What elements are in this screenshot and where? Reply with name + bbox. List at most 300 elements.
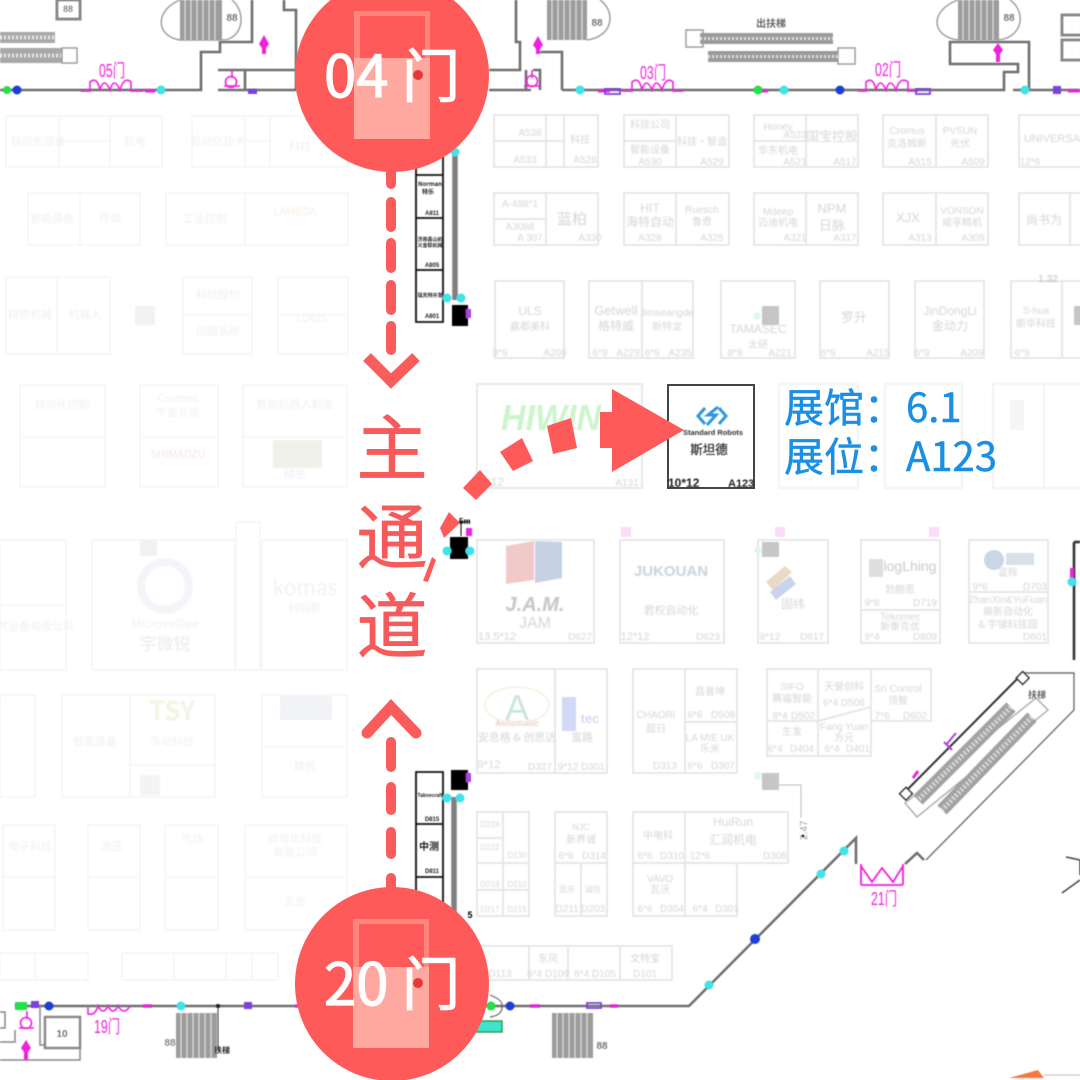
bottom-left restroom walls: 10: [56, 1029, 68, 1040]
faded booth labels: left hall: 智能机器人制造: [256, 396, 334, 412]
stair bottom centre-left: 88: [164, 1038, 176, 1049]
booth labels: right hall: D719: [913, 598, 937, 609]
booth labels: right hall: A309: [961, 233, 985, 244]
faded logos: left hall: [135, 306, 332, 795]
booth labels: right hall: D113: [488, 969, 512, 980]
main aisle label: [356, 393, 428, 673]
booth labels: right hall: 国宝控股: [806, 126, 858, 145]
faded booth labels: left hall: 科技股份: [196, 286, 240, 302]
booth labels: right hall: 9*12: [478, 759, 500, 771]
booth labels: right hall: 迈迪机电: [758, 214, 798, 229]
booth labels: right hall: D703: [1023, 582, 1047, 593]
badge circle: [295, 887, 489, 1080]
small booth column upper: 瑞克特开发: [417, 292, 443, 299]
booth labels: right hall: 安息格 & 创思达: [478, 729, 556, 745]
door icon: [353, 919, 429, 1048]
gate 19: [88, 1006, 130, 1037]
exhibition info: hall and booth: [784, 376, 997, 483]
small booth column upper: A805: [425, 263, 440, 269]
center escalators: [686, 17, 855, 64]
logo: JAM flag: [506, 541, 562, 584]
gate 02: [858, 60, 918, 91]
small booth column lower: D815: [425, 817, 440, 823]
logo: Automatic A: A: [505, 687, 529, 728]
aisle char 2: 通: [356, 482, 428, 584]
booth labels: right hall: Ruesch: [685, 205, 719, 216]
booth labels: right hall: 太研: [748, 336, 768, 351]
booth labels: right hall: 方元: [834, 729, 854, 744]
center escalators: 出扶梯: [756, 17, 786, 30]
stair capsule 3: 88: [1003, 13, 1015, 24]
booth labels: right hall: 12*6: [690, 851, 711, 862]
faded booth labels: left hall: 宇宙光电: [156, 404, 200, 420]
gray partitions: [454, 150, 455, 920]
booth labels: right hall: 尚书为: [1026, 211, 1062, 228]
booth labels: right hall: 6*6: [637, 851, 653, 862]
booth labels: right hall: logLhing: [884, 558, 936, 574]
stair bottom centre-right: [552, 1013, 608, 1058]
booth labels: right hall: 克洛姆斯: [887, 135, 927, 150]
small booth column upper: 特乐: [422, 187, 434, 196]
faded booth labels: left hall: 精密: [284, 466, 306, 482]
booth labels: right hall: 新泰克优: [880, 618, 920, 633]
booth labels: right hall: 12*12: [621, 631, 649, 643]
gate 02: 02门: [875, 60, 901, 80]
small booth column upper: 义金联机械: [417, 242, 443, 249]
booth labels: right hall: & 宇锑科技园: [978, 616, 1038, 631]
booth labels: right hall: D404: [790, 744, 814, 755]
faded booth labels: left hall: 宇微锐: [140, 630, 190, 655]
booth labels: right hall: 新界诚: [566, 831, 596, 846]
booth labels: right hall: 凯乐: [559, 884, 575, 895]
booth labels: right hall: D203: [581, 904, 605, 915]
booth labels: right hall: 9*6: [972, 582, 988, 593]
orange marker: [1009, 1070, 1080, 1078]
faded booth labels: left hall: 电子科技: [8, 838, 52, 854]
booth labels: right hall: 乐米: [700, 740, 720, 755]
logo: blue badge: [984, 550, 1034, 570]
lift box: 88: [63, 4, 73, 14]
booth labels: right hall: 6*9: [592, 348, 608, 359]
booth labels: right hall: 新特龙: [652, 318, 682, 333]
green dots: [3, 86, 762, 1010]
booth labels: right hall: 中电科: [643, 827, 673, 842]
booth labels: right hall: A521: [783, 157, 807, 168]
badge circle: [295, 0, 489, 172]
stair capsule 2: [547, 0, 610, 40]
booth labels: right hall: A515: [908, 157, 932, 168]
booth labels: right hall: 智能设备: [630, 141, 670, 156]
hall value: 6.1: [906, 376, 962, 434]
booth labels: right hall: D809: [913, 632, 937, 643]
bottom-left restroom walls: [0, 1006, 80, 1060]
target booth A123: [668, 385, 754, 490]
logo: Automatic A: [485, 687, 549, 728]
booth labels: right hall: 7*6: [874, 711, 890, 722]
booth labels: right hall: D211: [555, 904, 579, 915]
black pillars: [450, 305, 473, 920]
booth labels: right hall: D307: [711, 761, 735, 772]
booth labels: right hall: 斯华科技: [1016, 315, 1056, 330]
booth labels: right hall: D130: [507, 851, 527, 860]
booth labels: right hall: 光伏: [950, 135, 970, 150]
booth labels: right hall: 金动力: [932, 317, 968, 334]
booth labels: right hall: 12*6: [1020, 157, 1041, 168]
booth labels: right hall: Honey: [764, 122, 792, 133]
booth labels: right hall: NPM: [818, 201, 846, 216]
booth labels: right hall: 固纬: [781, 595, 805, 612]
gate 03: [622, 63, 683, 91]
booth labels: right hall: 科技公司: [630, 116, 670, 131]
booth labels: right hall: JinDongLi: [923, 304, 977, 318]
booth labels: right hall: 展新自动化: [983, 603, 1033, 618]
booth labels: right hall: D313: [653, 761, 677, 772]
booth labels: right hall: A3088: [506, 222, 535, 233]
booth labels: right hall: A530: [638, 157, 662, 168]
gate 21: [861, 864, 903, 909]
booth labels: right hall: Tekomec: [880, 612, 920, 623]
booth labels: right hall: PVSUN: [943, 126, 977, 137]
faded booth labels: left hall: 自动化科技: [268, 830, 322, 846]
small booth column lower: [416, 772, 443, 925]
booth labels: right hall: A 307: [517, 233, 543, 244]
faded booth labels: left hall: [0, 133, 338, 909]
lift box: [57, 0, 80, 19]
small booth column lower: D811: [425, 869, 440, 875]
aisle char 3: 道: [356, 571, 428, 673]
booth labels: right hall: D308: [763, 851, 787, 862]
booth labels: right hall: VONSON: [940, 206, 984, 217]
stair bottom centre-right: 88: [596, 1041, 608, 1052]
black pillars: 5: [467, 910, 473, 920]
faded booth labels: left hall: komas: [272, 572, 338, 602]
booth labels: right hall: A517: [833, 157, 857, 168]
booth labels: right hall: 科技・智造: [677, 133, 727, 148]
booth labels: right hall: 赛福智能: [772, 690, 812, 705]
stair capsule 1: [161, 0, 241, 40]
booth labels: right hall: 6*9: [914, 348, 930, 359]
booth labels: right hall: A221: [768, 348, 792, 359]
booth labels: right hall: 罗升: [841, 307, 867, 326]
booth labels: right hall: 6*6: [687, 710, 703, 721]
booth labels: right hall: 6*4: [692, 904, 708, 915]
booth labels: right hall: 日脉: [819, 215, 845, 234]
pillar accents: [466, 309, 471, 782]
booth labels: right hall: 6*9: [820, 348, 836, 359]
booth labels: right hall: 汇润机电: [709, 831, 757, 848]
booth labels: right hall: 鲁奇: [692, 213, 712, 228]
booth labels: right hall: Getwell: [594, 303, 638, 318]
escalator top-left: [0, 32, 77, 63]
small booth column upper: Norman: [418, 179, 442, 188]
lift boxes right: [1062, 15, 1080, 60]
booth labels: right hall: 6*4 D109: [527, 969, 569, 980]
small booth column upper: [416, 150, 443, 322]
booth labels: right hall: A229: [616, 348, 640, 359]
booth labels: right hall: A317: [833, 233, 857, 244]
logo: Sentec: [562, 697, 599, 731]
wheelchair symbols: [19, 70, 540, 1028]
booth labels: right hall: 威孚精机: [942, 214, 982, 229]
booth labels: right hall: D508: [711, 710, 735, 721]
booth labels: right hall: D601: [1023, 632, 1047, 643]
booth labels: right hall: A325: [700, 233, 724, 244]
booth labels: right hall: D217: [480, 905, 500, 914]
arrow: from gate 04 down: [367, 170, 416, 381]
small booth column upper: A801: [425, 314, 440, 320]
green elevator bar: [476, 995, 502, 1032]
booth labels: right hall: 蓝柏: [557, 208, 587, 229]
faded booth labels: left hall: 柯玛斯: [288, 600, 322, 616]
faded booth labels: left hall: 智能装备: [73, 733, 117, 749]
stair capsule 3: [937, 0, 1020, 40]
faded booths: left hall: [0, 116, 348, 980]
booth labels: right hall: VAVO: [647, 874, 673, 885]
booth labels: right hall: D222: [480, 843, 500, 852]
booth labels: right hall: D224: [480, 820, 500, 829]
faded booth labels: left hall: 精机: [294, 758, 316, 774]
booth labels: right hall: D617: [800, 632, 824, 643]
booth labels: right hall: Jimseangde: [640, 308, 694, 319]
booth labels: right hall: 8*12: [760, 632, 781, 643]
small booth column upper: A811: [425, 211, 440, 217]
booth labels: right hall: 8*9: [492, 348, 508, 359]
small booth column upper: 济南鑫山机: [417, 236, 443, 243]
booth labels: right hall: 6*9: [644, 348, 660, 359]
booth labels: right hall: 东风: [538, 950, 558, 965]
faded booth labels: left hall: TSY: [149, 691, 196, 728]
booth labels: right hall: A528: [573, 155, 597, 166]
stair bottom centre-left: 扶梯: [214, 1045, 230, 1055]
booth labels: right hall: D301: [715, 904, 739, 915]
booth labels: right hall: 超日: [646, 720, 666, 735]
booth labels: right hall: 科技: [570, 131, 590, 146]
booth labels: right hall: A523: [783, 130, 807, 141]
logo: HIWIN: HIWIN: [501, 397, 602, 438]
booth labels: right hall: J.A.M.: [506, 594, 564, 616]
booth labels: right hall: 海特自动: [626, 213, 674, 230]
booth labels: right hall: JUKOUAN: [634, 563, 708, 580]
booth labels: right hall: 勃朗思: [885, 581, 915, 596]
booth labels: right hall: D215: [507, 905, 527, 914]
gate word: 门: [402, 938, 460, 1022]
door icon: [354, 11, 430, 139]
gate 04 badge: [295, 0, 489, 172]
booth labels: right hall: 6*4: [767, 744, 783, 755]
booth labels: right hall: 文特宝: [630, 950, 660, 965]
booth labels: right hall: 8*4: [772, 711, 788, 722]
booth labels: right hall: 8*9: [727, 348, 743, 359]
booth labels: right hall: A529: [700, 157, 724, 168]
faded booth labels: left hall: 自动化技术: [190, 133, 246, 149]
faded booth labels: left hall: SHIMADZU: [150, 446, 206, 462]
booth labels: right hall: D218: [480, 880, 500, 889]
faded booth labels: left hall: 有限公司: [273, 844, 317, 860]
booth labels: right hall: D502: [791, 711, 815, 722]
booth labels: right hall: 9*4: [864, 632, 880, 643]
booth Chinese name: 斯坦德: [690, 439, 728, 458]
gate 20 badge: [295, 887, 489, 1080]
booth labels: right hall: 富辉: [998, 564, 1018, 579]
arrow: from gate 20 up: [367, 707, 416, 892]
pillar markers: 2.47: [799, 820, 810, 840]
booth labels: right hall: D301: [581, 762, 605, 773]
booth labels: right hall: A235: [668, 348, 692, 359]
booth labels: right hall: ZhanXin&YuFuan: [969, 595, 1047, 606]
booth labels: right hall: 昌普坤: [695, 683, 725, 698]
booth labels: right hall: Mdeep: [763, 207, 794, 218]
booth labels: right hall: *12: [486, 475, 504, 489]
booth labels: right hall: Cromus: [889, 126, 925, 137]
booth label: 展位：: [784, 425, 904, 483]
aisle char 1: 主: [356, 393, 428, 495]
icon: Standard Robots logo: [698, 407, 726, 425]
faded booth labels: left hall: 智能装备: [30, 210, 74, 226]
booth labels: right hall: A-488*1: [502, 199, 539, 210]
booth labels: right hall: LA MIE UK: [686, 733, 735, 744]
logo: colored ribbon: [766, 566, 796, 600]
cyan dots: [156, 86, 1076, 1010]
small magenta dashes: [143, 91, 1080, 1006]
faded booth labels: left hall: 气动: [181, 831, 203, 847]
booth labels: right hall: 诚信: [585, 884, 601, 895]
booth labels: right hall: SIFO: [780, 682, 804, 693]
booth brand name: Standard Robots: [683, 428, 743, 437]
purple markers: [587, 89, 930, 1008]
faded booth labels: left hall: LAMBDA: [274, 203, 317, 219]
faded booth labels: left hall: 工业控制: [183, 210, 227, 226]
booth labels: right hall: Automatic: [495, 718, 539, 728]
booth labels: right hall: 天誉创科: [824, 678, 864, 693]
booth labels: right hall: 9*12: [558, 762, 579, 773]
booth labels: right hall: 君权自动化: [644, 602, 698, 618]
stair bottom centre-left: [164, 1004, 230, 1058]
booth labels: right hall: XJX: [896, 210, 920, 225]
faded booth labels: left hall: 自动化设备: [10, 133, 66, 149]
black pillars: 5m: [459, 517, 471, 526]
diagonal escalators: 扶梯: [1028, 689, 1046, 700]
booth labels: right hall: HIT: [640, 201, 660, 215]
gate number: 04: [324, 30, 388, 114]
booth labels: right hall: D602: [903, 711, 927, 722]
faded booth labels: left hall: 液压: [101, 838, 123, 854]
booth labels: right hall: D627: [568, 632, 592, 643]
faded booth labels: left hall: Cosmos: [158, 390, 198, 406]
booth labels: right hall: TAMASEC: [729, 322, 787, 336]
gate number: 20: [324, 938, 388, 1022]
blue dots: [12, 86, 844, 1010]
booth labels: right hall: 领智: [888, 692, 908, 707]
faded booth labels: left hall: 精密机械: [8, 306, 52, 322]
booth labels: right hall: ULS: [518, 304, 542, 318]
logos on right hall booths: [485, 397, 1034, 731]
booths: right hall: [477, 115, 1080, 980]
faded booth labels: left hall: 传动科技: [150, 733, 194, 749]
pillar markers: [621, 306, 1080, 840]
booth labels: right hall: D304: [660, 904, 684, 915]
booth labels: right hall: HuiRun: [713, 815, 753, 829]
booth labels: right hall: D327: [528, 762, 552, 773]
gate 19: 19门: [94, 1017, 120, 1037]
booth labels: right hall: 9*8: [864, 598, 880, 609]
diagonal escalators: [900, 672, 1048, 817]
booth labels: right hall: A313: [908, 233, 932, 244]
faded booth labels: left hall: Microvelllee: [131, 615, 199, 632]
booth labels: right hall: D314: [582, 851, 606, 862]
faded booth labels: left hall: 传动: [99, 210, 121, 226]
faded booth labels: left hall: 五金: [284, 893, 306, 909]
booth labels: right hall: 6*6: [637, 904, 653, 915]
faded booth labels: left hall: LOGIS: [296, 310, 328, 326]
stair capsule 1: 88: [226, 13, 238, 24]
booth labels: right hall: A509: [961, 157, 985, 168]
booth labels: right hall: [478, 116, 1080, 980]
booth labels: right hall: 6*9: [1014, 348, 1030, 359]
booth size: 10*12: [668, 476, 700, 490]
booth labels: right hall: A131: [615, 478, 639, 489]
booth labels: right hall: 华东机电: [758, 142, 798, 157]
booth labels: right hall: 生发: [782, 723, 802, 738]
booth labels: right hall: A533: [513, 155, 537, 166]
booth labels: right hall: A328: [638, 233, 662, 244]
booth labels: right hall: NJC: [572, 822, 590, 832]
gate 03: 03门: [640, 63, 666, 83]
booth labels: right hall: A538: [518, 128, 542, 139]
gate 21: 21门: [871, 889, 897, 909]
booth labels: right hall: 6*4 D506: [823, 698, 865, 709]
booth labels: right hall: D310: [660, 851, 684, 862]
small booth column lower: Taknecraft: [418, 793, 443, 799]
booth labels: right hall: 6*4: [824, 744, 840, 755]
booth labels: right hall: D101: [633, 969, 657, 980]
booth labels: right hall: CHAORI: [637, 710, 675, 721]
faded booth labels: left hall: 科技: [289, 138, 311, 154]
booth labels: right hall: JAM: [519, 615, 551, 632]
gate word: 门: [402, 30, 460, 114]
faded booth labels: left hall: 机电: [124, 133, 146, 149]
stair capsule 2: 88: [591, 18, 603, 29]
booth labels: right hall: S-hua: [1023, 306, 1050, 317]
booth labels: right hall: D623: [696, 632, 720, 643]
faded booth labels: left hall: 机器人: [68, 306, 102, 322]
booth labels: right hall: D401: [846, 744, 870, 755]
compass star: [1062, 857, 1080, 893]
booth labels: right hall: 格特威: [598, 317, 634, 334]
booth labels: right hall: A321: [783, 233, 807, 244]
booth labels: right hall: A330: [578, 233, 602, 244]
faded booth labels: left hall: 自动化控制: [34, 396, 90, 412]
booth labels: right hall: 8*4 D105: [574, 969, 616, 980]
arrow: curved dashed to booth: [423, 389, 684, 582]
booth labels: right hall: Sri Control: [874, 684, 922, 695]
small booth column lower: 中测: [419, 838, 439, 853]
booth labels: right hall: 6*6: [558, 851, 574, 862]
faded booth labels: left hall: 伺服系统: [196, 323, 240, 339]
logo: Sentec: tec: [581, 711, 599, 726]
booth labels: right hall: A208: [543, 348, 567, 359]
booth labels: right hall: 6*6: [687, 761, 703, 772]
booth labels: right hall: 富路: [571, 729, 593, 745]
booth labels: right hall: A209: [960, 348, 984, 359]
booth labels: right hall: 13.5*12: [478, 631, 516, 643]
booth outline: [668, 385, 754, 488]
gate 05: 05门: [99, 61, 125, 81]
booth value: A123: [906, 425, 997, 483]
booth labels: right hall: A215: [866, 348, 890, 359]
hall number: 展馆：: [784, 376, 904, 434]
booth number: A123: [728, 478, 754, 490]
booth labels: right hall: 瓦沃: [650, 881, 670, 896]
